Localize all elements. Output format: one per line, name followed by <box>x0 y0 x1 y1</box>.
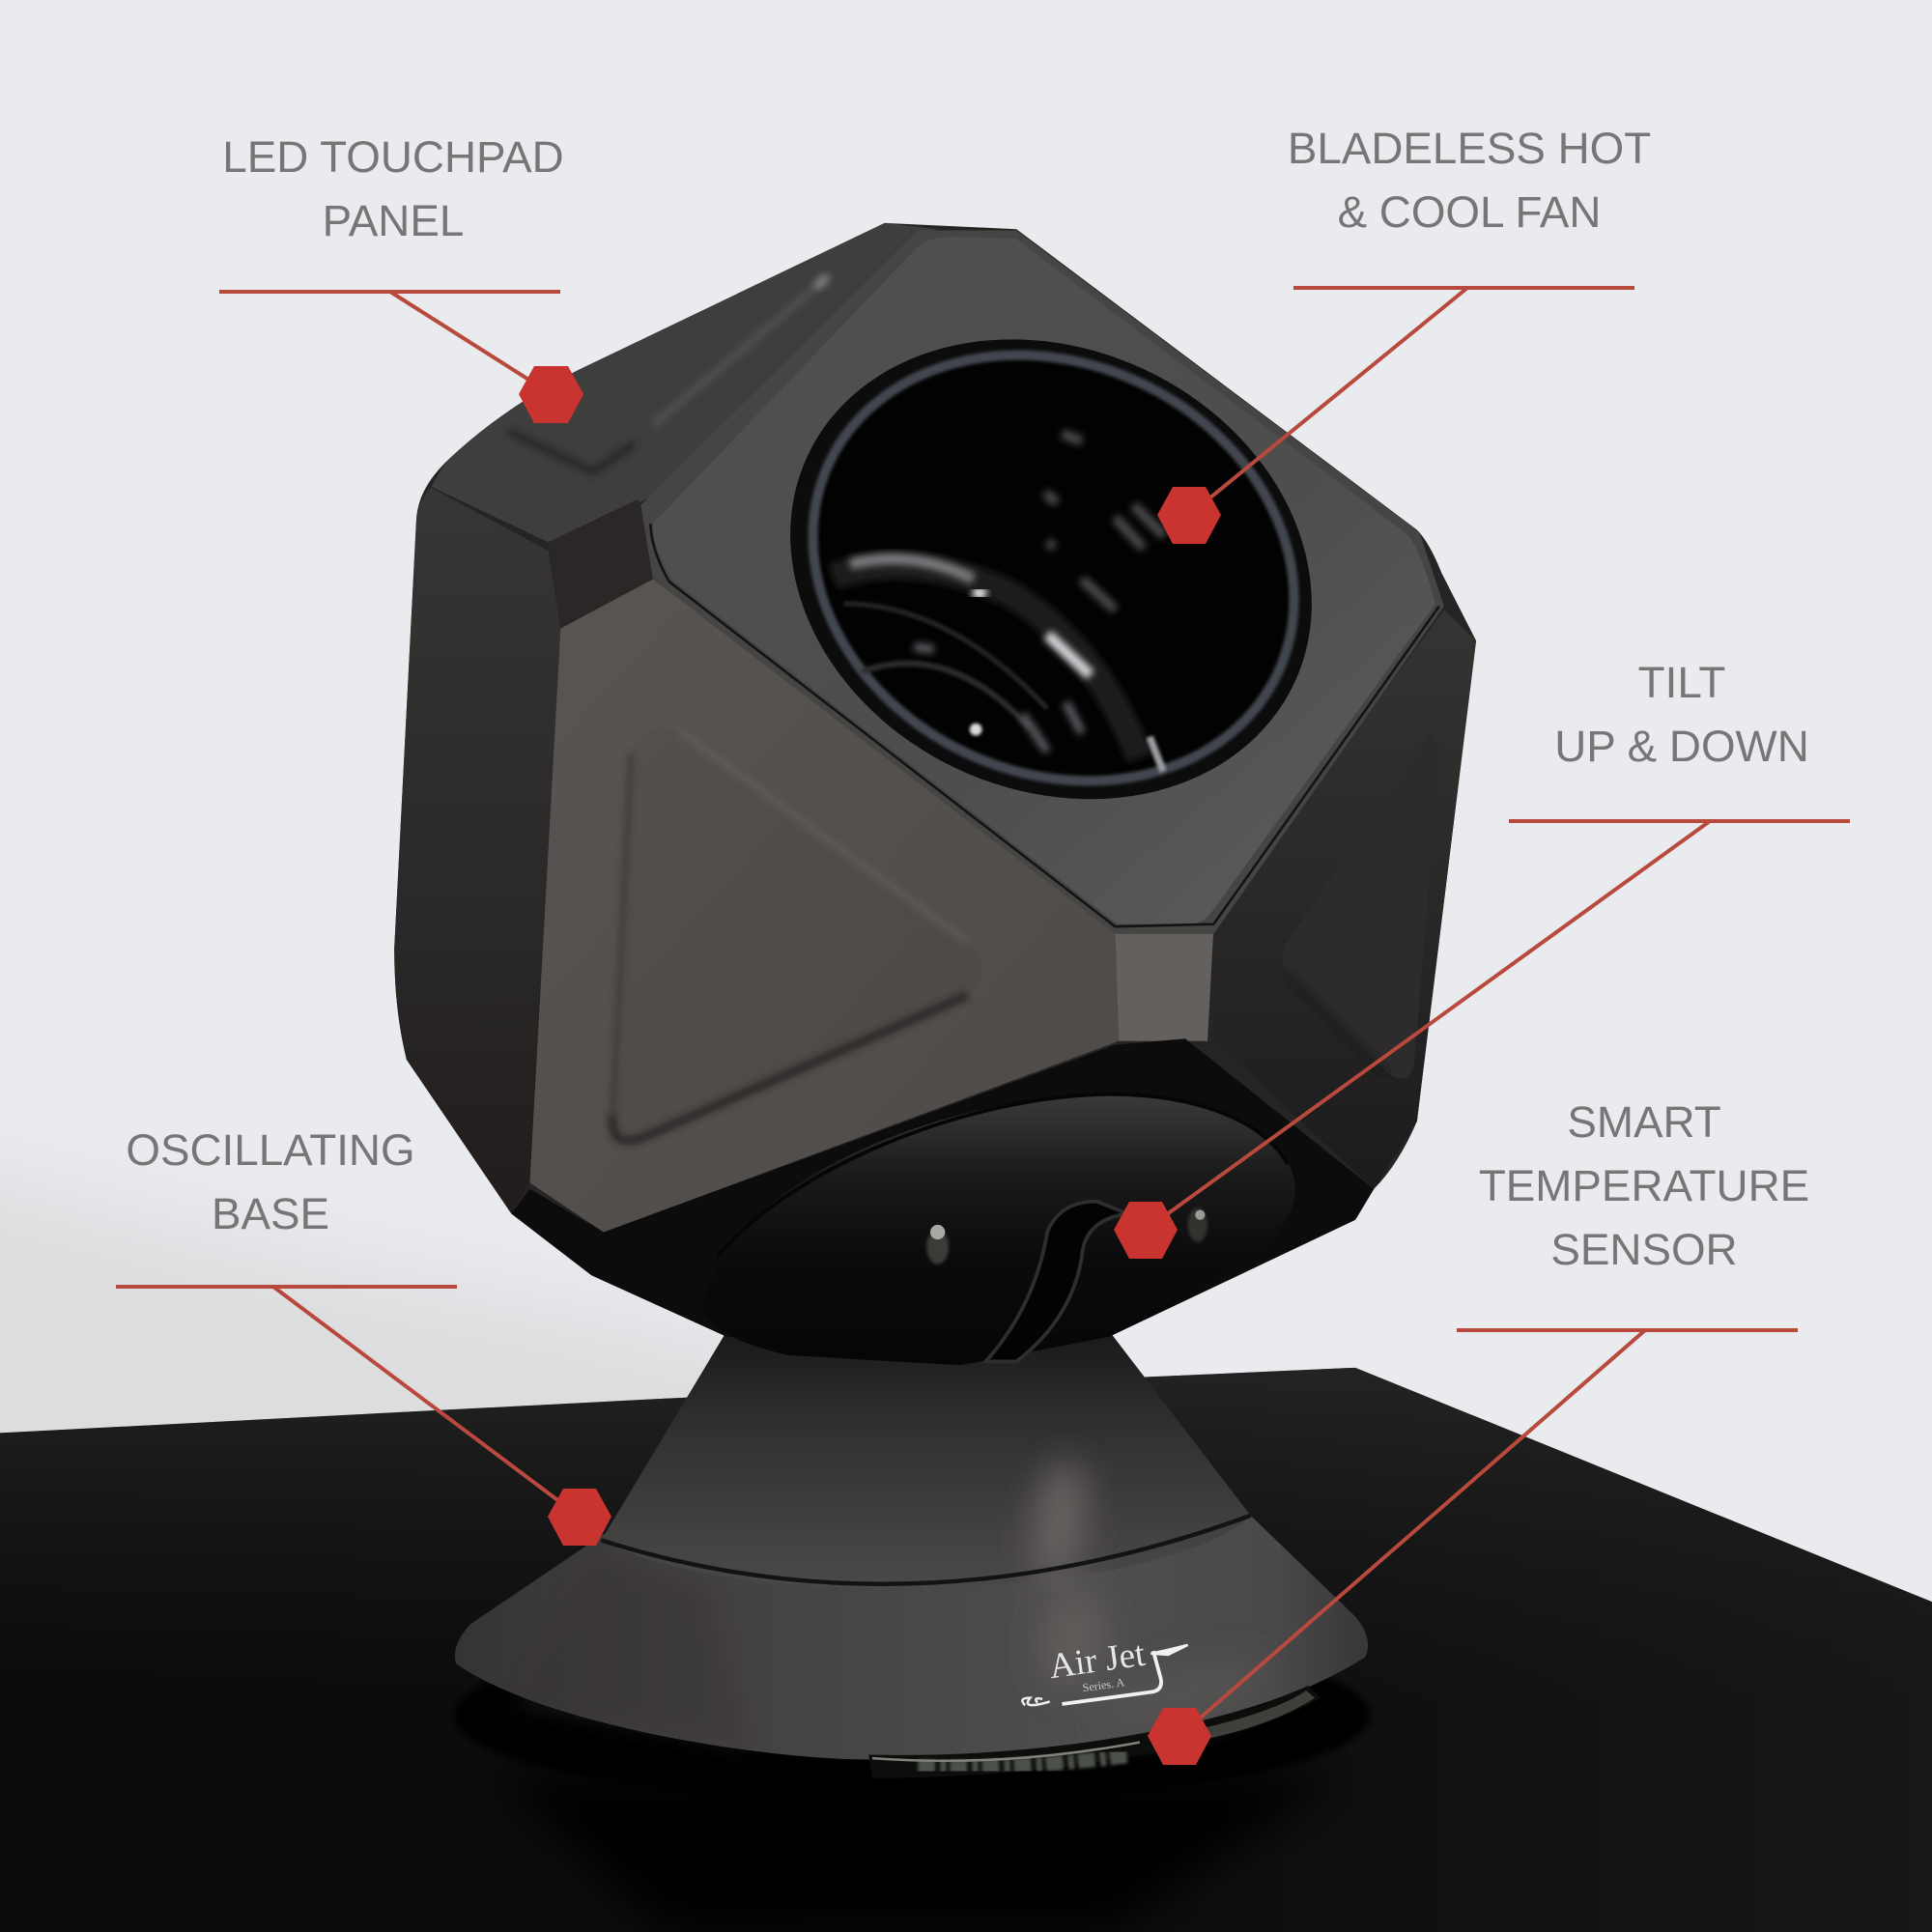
lower black underside <box>511 1038 1374 1337</box>
marker <box>519 366 583 423</box>
touchpad groove <box>508 276 828 472</box>
upper base cone <box>601 1331 1251 1589</box>
cone divider line <box>601 1516 1251 1584</box>
label: BASE <box>212 1189 329 1238</box>
outer rim <box>715 256 1388 883</box>
corner facet <box>549 499 656 626</box>
marker <box>1114 1202 1178 1259</box>
label: TILT <box>1638 658 1725 707</box>
label: SENSOR <box>1550 1225 1738 1274</box>
logo: Air Jet: Series. A <box>1082 1675 1125 1694</box>
label: OSCILLATING <box>126 1125 415 1175</box>
cone fold shading <box>518 1559 752 1749</box>
label: LED TOUCHPAD <box>222 132 564 182</box>
cone highlights <box>1027 1458 1273 1743</box>
lower base cone <box>455 1516 1368 1760</box>
base contact shadow <box>453 1627 1370 1804</box>
screw right <box>1188 1208 1208 1242</box>
callout: oscillating base <box>116 1125 611 1546</box>
inner black <box>744 279 1363 857</box>
label: UP & DOWN <box>1554 722 1809 771</box>
raised triangle panel <box>612 727 982 1141</box>
main face seam <box>650 524 1439 926</box>
right face triangle <box>1282 733 1439 1079</box>
lighter corner facet <box>1115 926 1213 1041</box>
yoke slot <box>985 1202 1127 1361</box>
main circular-fan face <box>653 237 1435 924</box>
marker <box>548 1489 611 1546</box>
leader line <box>1179 1330 1798 1736</box>
right face <box>1213 610 1476 1189</box>
top face with touchpad <box>431 223 936 542</box>
leader line <box>219 292 560 394</box>
wall shadow <box>0 1133 863 1552</box>
logo: Air Jet: Air Jet <box>1046 1634 1148 1686</box>
label: TEMPERATURE <box>1479 1161 1809 1210</box>
fan head silhouette <box>394 223 1476 1337</box>
table reflection <box>493 1775 1343 1932</box>
lower front face <box>529 579 1119 1233</box>
table top <box>0 1368 1932 1932</box>
callout: smart temperature sensor <box>1148 1097 1809 1765</box>
leader line <box>1146 821 1850 1230</box>
label: BLADELESS HOT <box>1288 124 1651 173</box>
callout: tilt up and down <box>1114 658 1850 1259</box>
label: & COOL FAN <box>1338 187 1601 237</box>
callout: bladeless hot and cool fan <box>1157 124 1651 544</box>
yoke mount <box>702 1094 1295 1365</box>
label: SMART <box>1567 1097 1721 1147</box>
bevel around main face <box>640 231 1444 934</box>
marker <box>1157 487 1221 544</box>
leader line <box>1189 288 1634 515</box>
fan interior reflections <box>833 434 1164 771</box>
marker <box>1148 1708 1211 1765</box>
blue-grey ring <box>743 278 1364 858</box>
fan opening <box>715 256 1388 883</box>
logo: Air Jet <box>1022 1634 1188 1705</box>
leader line <box>116 1287 580 1517</box>
label: PANEL <box>323 196 464 245</box>
sensor strip <box>868 1686 1321 1778</box>
screw left <box>926 1225 949 1264</box>
left face <box>394 488 560 1213</box>
table sheen <box>0 1368 1932 1932</box>
callout: LED touchpad panel <box>219 132 583 423</box>
